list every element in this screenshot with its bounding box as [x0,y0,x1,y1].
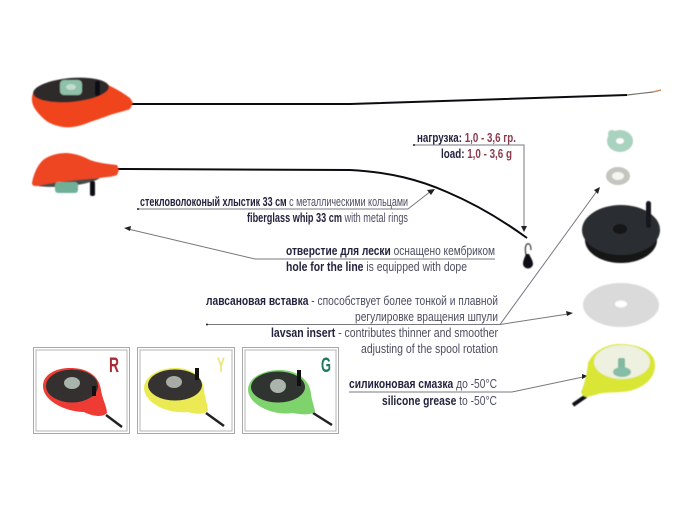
callout: silicone grease [349,374,588,408]
callout: lavsan insert: лавсановая вставка - способствует более тонкой и плавной [206,294,498,308]
callout: silicone grease: силиконовая смазка до -50°C [349,377,497,391]
callout: line hole: отверстие для лески оснащено кембриком [286,244,495,258]
callout: line hole [124,226,495,274]
icon: hook and sinker [523,244,533,268]
panel: green variant G [242,348,338,434]
callout: load [413,131,527,232]
panel: green variant G: G [321,354,331,377]
callout: whip: стекловолоконый хлыстик 33 см с металлическими кольцами [140,195,408,209]
part: yellow body with axle [573,344,655,405]
panel: yellow variant Y: Y [217,354,225,377]
rod: side view, bent [32,153,527,238]
callout: lavsan insert [206,187,600,356]
callout: whip: fiberglass whip 33 cm with metal rings [247,211,408,225]
panel: yellow variant Y [138,348,234,434]
part: lavsan disc [583,283,659,327]
part: washer [606,167,630,185]
part: black spool [582,201,660,263]
callout: lavsan insert: lavsan insert - contributes thinner and smoother [271,326,498,340]
rod: top view, straight [32,75,661,127]
callout: whip [137,189,435,225]
callout: lavsan insert: регулировке вращения шпули [355,310,498,324]
callout: load: load: 1,0 - 3,6 g [441,147,512,161]
callout: load: нагрузка: 1,0 - 3,6 гр. [417,131,516,145]
callout: silicone grease: silicone grease to -50°C [382,394,497,408]
panel: red variant R: R [109,354,119,377]
callout: line hole: hole for the line is equipped with dope [286,260,467,274]
callout: lavsan insert: adjusting of the spool rotation [361,342,498,356]
part: green nut [607,130,633,152]
panel: red variant R [34,348,130,434]
